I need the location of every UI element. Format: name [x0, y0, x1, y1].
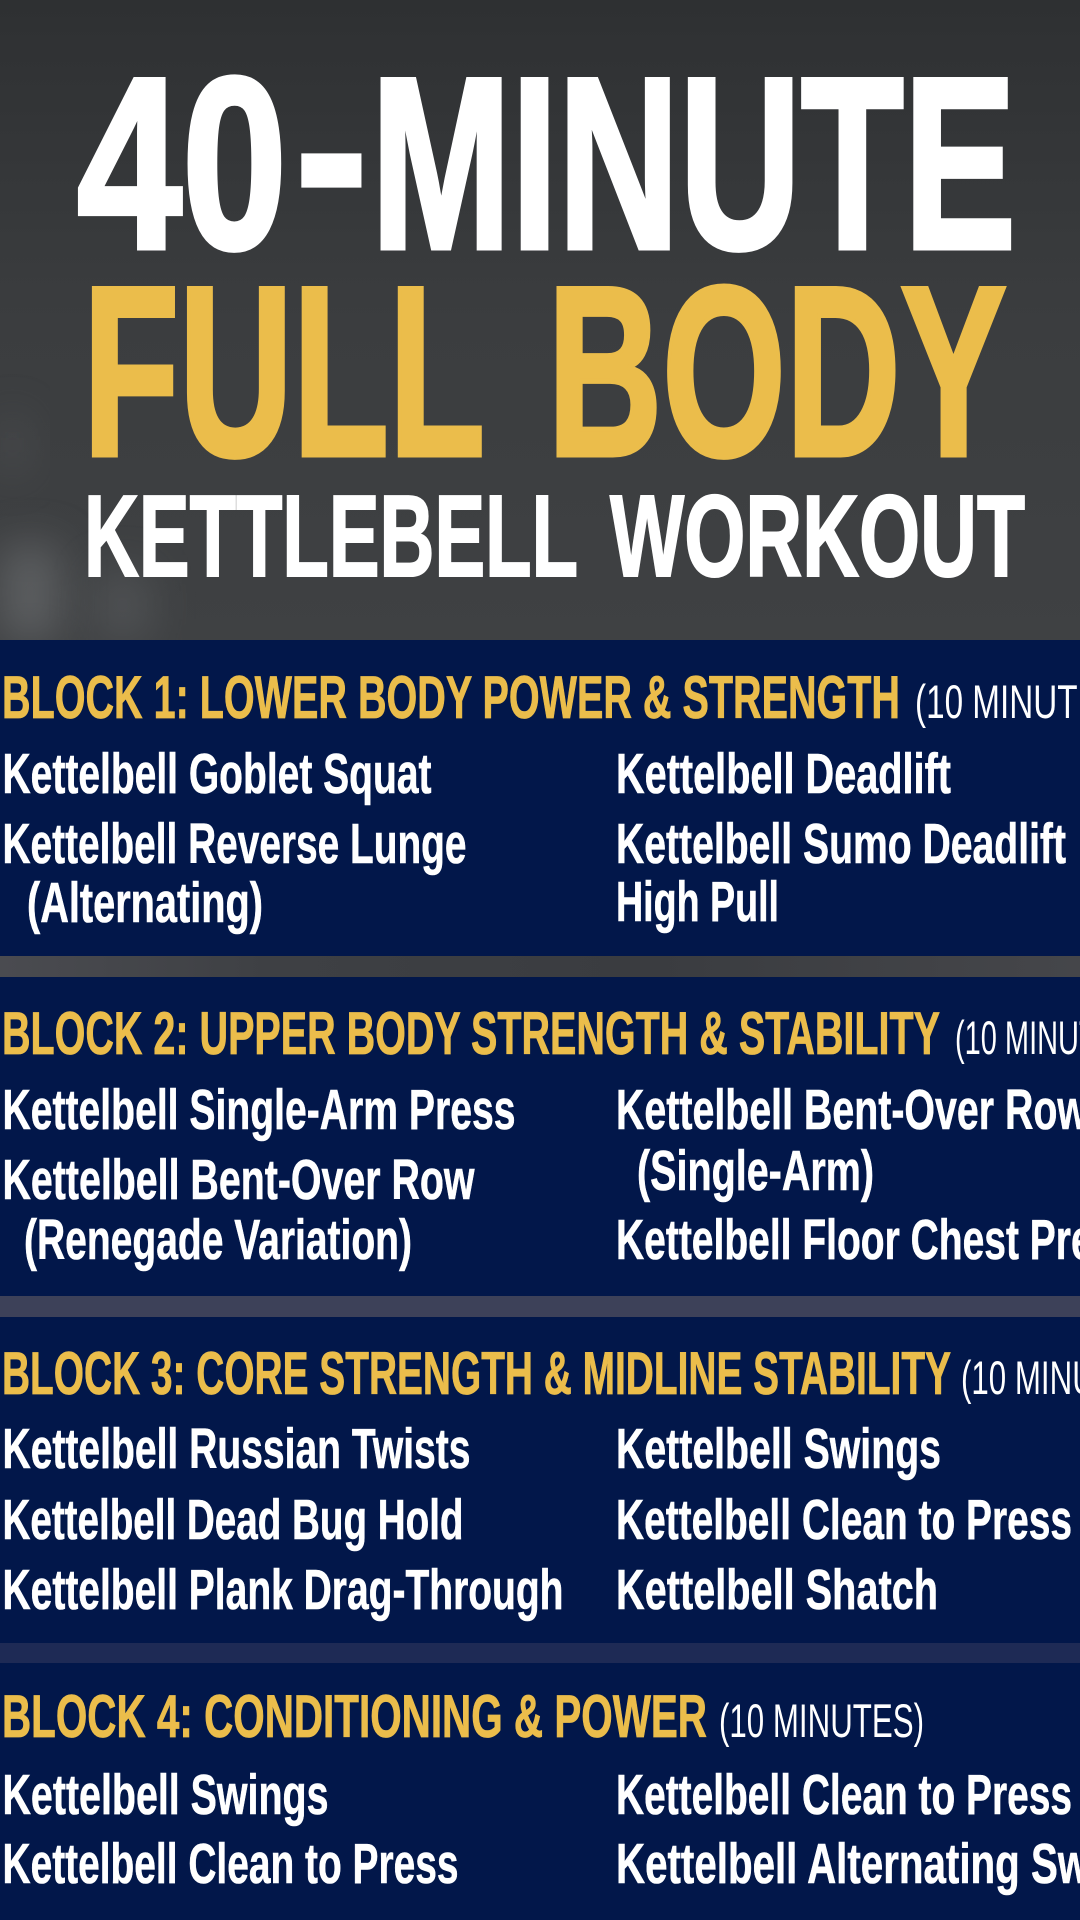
exercise: Kettelbell Swings [616, 1417, 941, 1481]
exercise note: (Renegade Variation) [24, 1208, 412, 1272]
exercise: Kettelbell Plank Drag-Through [2, 1558, 564, 1622]
exercise: Kettelbell Swings [2, 1763, 328, 1827]
title line: full body: FULL [83, 237, 485, 507]
exercise: Kettelbell Russian Twists [2, 1417, 470, 1481]
title line: full body [83, 237, 1006, 507]
duration: block 4: (10 MINUTES) [719, 1694, 924, 1747]
exercise note: (Single-Arm) [637, 1139, 874, 1203]
exercise: Kettelbell Reverse Lunge [2, 812, 466, 876]
panel: block 1 [2, 664, 1080, 935]
title line: 40-minute [77, 12, 1016, 300]
title line: 40-minute: - [295, 12, 368, 286]
title [77, 12, 1025, 601]
title line: kettlebell workout: KETTLEBELL [84, 471, 578, 601]
panel: block 3 [2, 1340, 1080, 1622]
exercise continuation: High Pull [616, 870, 779, 934]
exercise: Kettelbell Single-Arm Press [2, 1078, 516, 1142]
panel: block 4 [2, 1683, 1080, 1896]
exercise: Kettelbell Bent-Over Row [2, 1148, 475, 1212]
exercise note: (Alternating) [27, 871, 263, 935]
panel: block 2 [2, 1000, 1080, 1272]
exercise: Kettelbell Dead Bug Hold [2, 1488, 464, 1552]
exercise: Kettelbell Clean to Press [2, 1832, 458, 1896]
panel: header background [0, 0, 1080, 640]
exercise: Kettelbell Goblet Squat [2, 742, 432, 806]
panel: workout blocks background [0, 640, 1080, 1920]
heading: block 4: BLOCK 4: CONDITIONING & POWER [2, 1683, 707, 1750]
title line: 40-minute: 40 [77, 26, 287, 300]
exercise: Kettelbell Shatch [616, 1558, 938, 1622]
